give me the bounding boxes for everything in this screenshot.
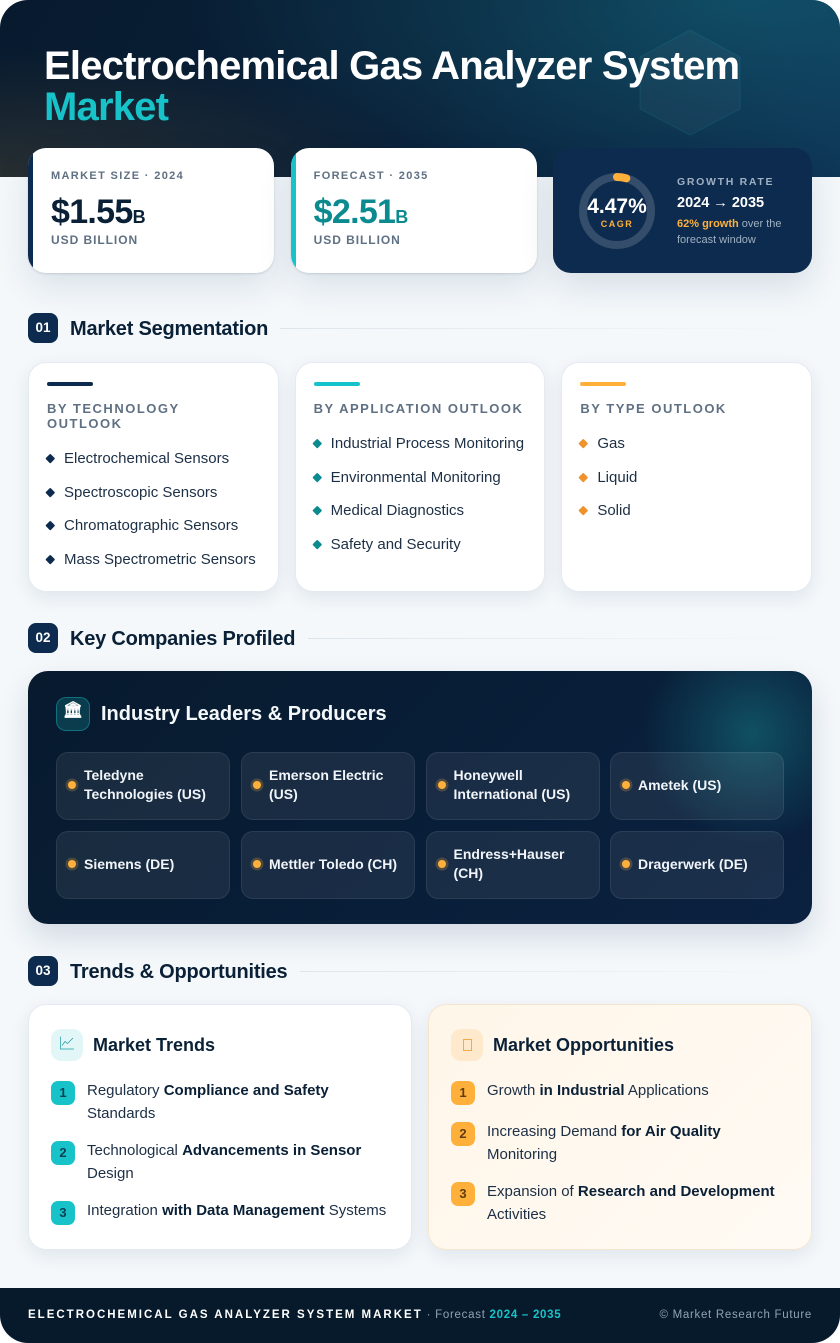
section heading: 02 Key Companies Profiled [28, 623, 634, 653]
stat card: CAGR growth rate: GROWTH RATE [677, 176, 774, 188]
company: Dragerwerk: Dragerwerk (DE) [638, 856, 748, 872]
company: Ametek: Ametek (US) [638, 776, 721, 792]
company: Honeywell: Honeywell International (US) [454, 767, 570, 802]
panel: market trends: Technological Advancements in Sensor Design [87, 1142, 361, 1182]
panel: by type outlook: Gas [597, 435, 625, 452]
section heading: 03 Trends & Opportunities: Trends & Opportunities [70, 961, 287, 983]
company: Endress+Hauser [426, 831, 600, 899]
panel: market trends: 1 [59, 1085, 67, 1100]
stat card: CAGR growth rate: 2024 → 2035 [677, 195, 764, 211]
panel: market opportunities: 1 [459, 1085, 467, 1100]
stat card: forecast 2035 [291, 148, 537, 273]
section heading: 01 Market Segmentation: 01 [35, 320, 51, 335]
company: Siemens: Siemens (DE) [84, 856, 174, 872]
panel: market trends: 2 [59, 1145, 67, 1160]
stat card: CAGR growth rate: CAGR [601, 219, 633, 229]
icon: missing glyph box [451, 1029, 483, 1061]
panel: market opportunities: Expansion of Research and Development Activities [487, 1183, 775, 1222]
panel: by type outlook: BY TYPE OUTLOOK [580, 401, 727, 416]
icon: institution [56, 697, 90, 731]
trend 2 [51, 1141, 362, 1182]
footer [0, 1288, 840, 1343]
stat card: forecast 2035: $2.51B [314, 193, 408, 231]
stat card: forecast 2035: FORECAST · 2035 [314, 170, 429, 182]
company: Mettler Toledo: Mettler Toledo (CH) [269, 856, 397, 872]
section heading: 01 Market Segmentation: Market Segmentation [70, 318, 268, 340]
section heading: 02 Key Companies Profiled: 02 [35, 630, 51, 645]
trend 3 [51, 1201, 386, 1225]
panel: market opportunities: Increasing Demand for Air Quality Monitoring [487, 1123, 721, 1162]
panel: market trends [28, 1004, 412, 1250]
opportunity 3 [451, 1182, 775, 1222]
panel: by application outlook: Safety and Security [331, 536, 461, 553]
stat card: market size 2024 [28, 148, 274, 273]
icon: line chart [51, 1029, 83, 1061]
panel: by type outlook [561, 362, 812, 592]
section heading: 01 Market Segmentation [28, 313, 626, 343]
company: Emerson [241, 752, 415, 820]
panel: by application outlook: Environmental Monitoring [331, 469, 501, 486]
company: Siemens [56, 831, 230, 899]
panel: by application outlook: BY APPLICATION OUTLOOK [314, 401, 523, 416]
panel: market opportunities: 3 [459, 1186, 467, 1201]
footer: ELECTROCHEMICAL GAS ANALYZER SYSTEM MARKET · Forecast 2024 – 2035 [28, 1309, 561, 1321]
stat card: market size 2024: MARKET SIZE · 2024 [51, 170, 184, 182]
company: Honeywell [426, 752, 600, 820]
panel: market trends: Integration with Data Management Systems [87, 1202, 386, 1219]
company: Mettler Toledo [241, 831, 415, 899]
panel: by technology outlook: Electrochemical Sensors [64, 450, 229, 467]
panel: by technology outlook: Spectroscopic Sensors [64, 484, 217, 501]
section heading: 02 Key Companies Profiled: Key Companies Profiled [70, 628, 295, 650]
stat card: market size 2024: $1.55B [51, 193, 146, 231]
panel: by application outlook: Medical Diagnostics [331, 502, 464, 519]
panel: by type outlook: Liquid [597, 469, 637, 486]
opportunity 1 [451, 1081, 709, 1105]
company: Teledyne [56, 752, 230, 820]
panel: by application outlook: Industrial Process Monitoring [331, 435, 524, 452]
stat card: CAGR growth rate: 4.47% [587, 195, 647, 218]
icon: hexagon watermark [640, 30, 740, 136]
stat card: CAGR growth rate [553, 148, 812, 273]
panel: industry leaders [28, 671, 812, 924]
panel: market trends: Market Trends [93, 1035, 215, 1055]
panel: by type outlook: Solid [597, 502, 631, 519]
panel: by technology outlook: BY TECHNOLOGY OUTLOOK [47, 401, 179, 431]
company: Emerson: Emerson Electric (US) [269, 767, 383, 802]
panel: by technology outlook: Mass Spectrometric Sensors [64, 551, 256, 568]
company: Dragerwerk [610, 831, 784, 899]
panel: by application outlook [295, 362, 545, 592]
panel heading: Industry Leaders & Producers [101, 703, 387, 725]
section heading: 03 Trends & Opportunities: 03 [35, 963, 51, 978]
title: Electrochemical Gas Analyzer System Market [44, 44, 739, 129]
panel: market trends: 3 [59, 1205, 67, 1220]
stat card: market size 2024: USD BILLION [51, 233, 138, 247]
panel: by technology outlook [28, 362, 279, 592]
panel: market opportunities: Market Opportunities [493, 1035, 674, 1055]
company: Endress+Hauser: Endress+Hauser (CH) [454, 846, 564, 881]
header band [0, 0, 840, 177]
stat card: forecast 2035: USD BILLION [314, 233, 401, 247]
section heading: 03 Trends & Opportunities [28, 956, 632, 986]
opportunity 2 [451, 1122, 721, 1162]
panel: market opportunities: Growth in Industrial Applications [487, 1082, 709, 1099]
panel: market trends: Regulatory Compliance and Safety Standards [87, 1082, 329, 1122]
trend 1 [51, 1081, 329, 1122]
panel: market opportunities [428, 1004, 812, 1250]
stat card: CAGR growth rate: 62% growth over the [677, 218, 782, 230]
donut chart: CAGR [579, 173, 655, 249]
stat card: CAGR growth rate: forecast window [677, 234, 756, 246]
panel: by technology outlook: Chromatographic Sensors [64, 517, 238, 534]
panel: market opportunities: 2 [459, 1126, 467, 1141]
footer: © Market Research Future [660, 1309, 812, 1321]
company: Teledyne: Teledyne Technologies (US) [84, 767, 206, 802]
icon: institution: 🏛 [63, 702, 83, 719]
company: Ametek [610, 752, 784, 820]
